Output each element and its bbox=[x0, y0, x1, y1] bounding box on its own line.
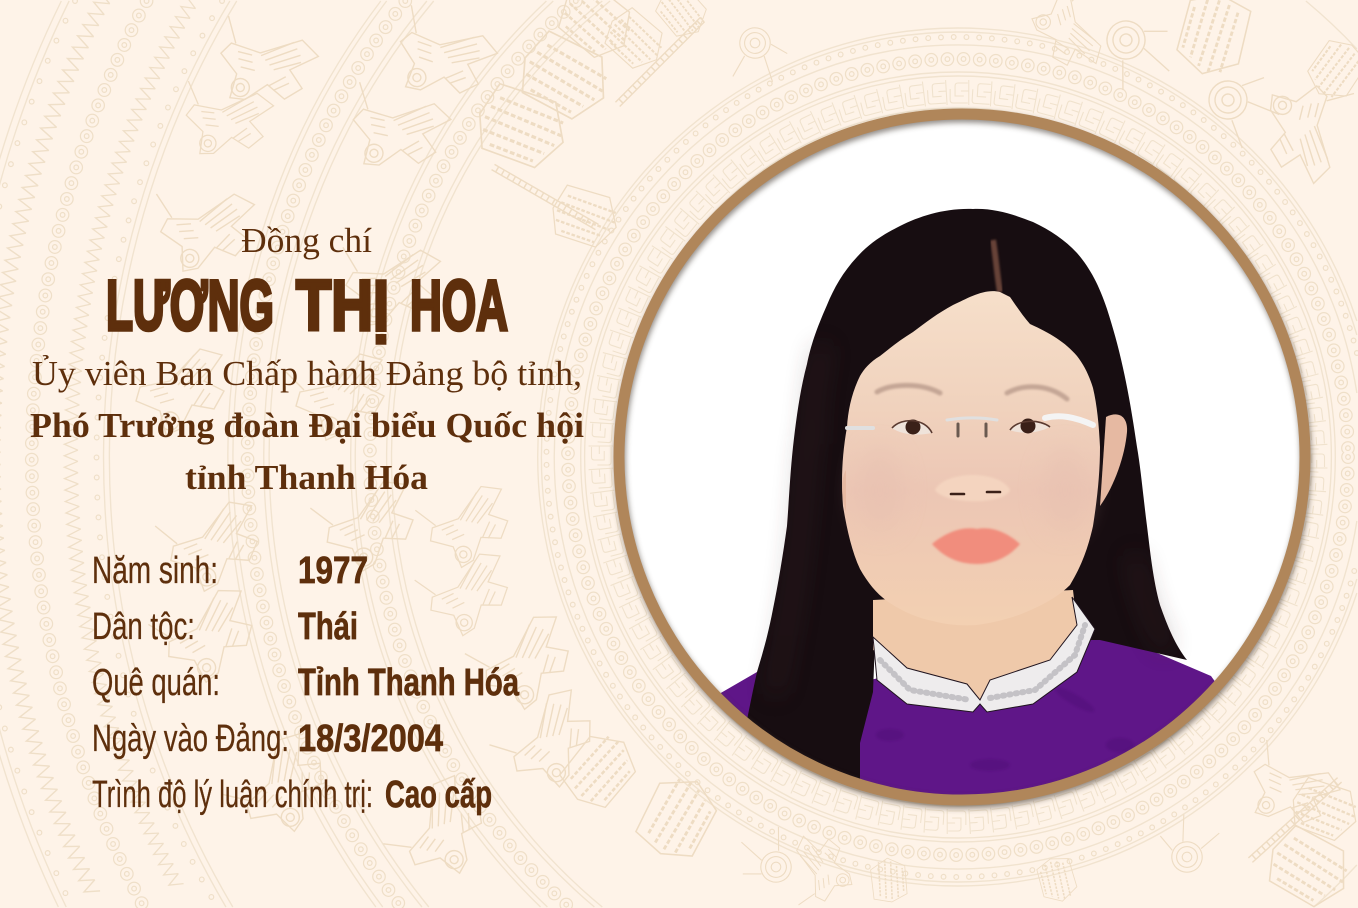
political theory level: Trình độ lý luận chính trị: bbox=[92, 774, 373, 816]
position text block: Ủy viên Ban Chấp hành Đảng bộ tỉnh, bbox=[32, 354, 582, 393]
birth year: 1977 bbox=[298, 550, 368, 592]
birth year bbox=[92, 550, 368, 592]
title: name: HOA bbox=[410, 267, 508, 346]
portrait photo bbox=[622, 117, 1302, 830]
hair highlights bbox=[775, 350, 1165, 690]
hometown bbox=[92, 662, 520, 704]
dress shading bbox=[878, 690, 1132, 750]
hometown: Quê quán: bbox=[92, 662, 220, 704]
nose bbox=[935, 475, 1010, 501]
party admission date: 18/3/2004 bbox=[298, 718, 443, 760]
ethnicity: Dân tộc: bbox=[92, 606, 195, 648]
ears bbox=[842, 414, 1127, 512]
hair part bbox=[993, 240, 1000, 292]
shoulders: purple dress bbox=[720, 640, 1214, 794]
position text block: Phó Trưởng đoàn Đại biểu Quốc hội bbox=[30, 406, 584, 445]
title: name: THỊ bbox=[296, 267, 389, 346]
title: name bbox=[106, 267, 508, 346]
ethnicity bbox=[92, 606, 358, 648]
key pattern band bbox=[575, 66, 1341, 848]
neck bbox=[873, 590, 1077, 702]
zigzag bands bbox=[0, 0, 719, 898]
portrait frame bbox=[619, 114, 1306, 803]
position text block bbox=[30, 354, 584, 497]
position text block: tỉnh Thanh Hóa bbox=[185, 458, 428, 497]
biography details bbox=[92, 550, 520, 816]
political theory level: Cao cấp bbox=[385, 774, 492, 816]
birth year: Năm sinh: bbox=[92, 550, 218, 592]
eyes bbox=[892, 418, 1050, 435]
white collar bbox=[873, 597, 1095, 712]
mouth bbox=[932, 528, 1020, 564]
face bbox=[842, 291, 1100, 625]
cheek shading bbox=[1093, 470, 1102, 526]
title: name: LƯƠNG bbox=[106, 267, 274, 346]
hair bbox=[747, 209, 1187, 810]
white photo background bbox=[624, 120, 1300, 693]
party admission date: Ngày vào Đảng: bbox=[92, 718, 289, 760]
eyebrows bbox=[877, 385, 1067, 399]
ethnicity: Thái bbox=[298, 606, 358, 648]
glasses bbox=[847, 416, 1093, 436]
hometown: Tỉnh Thanh Hóa bbox=[298, 662, 520, 704]
heading: Đồng chí: Đồng chí bbox=[241, 221, 372, 260]
